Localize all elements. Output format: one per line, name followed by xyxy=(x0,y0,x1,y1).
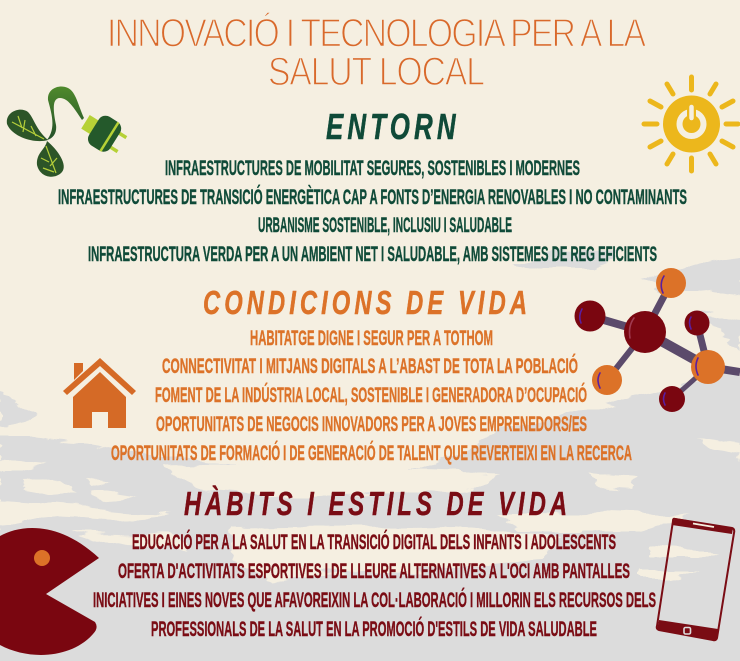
background: grey edge fill xyxy=(0,385,740,661)
icon: pac-man character xyxy=(0,528,99,655)
icon: smartphone xyxy=(657,518,734,640)
icon: house xyxy=(63,358,136,428)
heading: hàbits i estils de vida: HÀBITS I ESTILS DE VIDA xyxy=(184,484,567,523)
title: INNOVACIÓ I TECNOLOGIA PER A LA xyxy=(107,11,646,55)
heading: entorn: ENTORN xyxy=(326,107,457,147)
text block: condicions de vida items: HABITATGE DIGNE I SEGUR PER A TOTHOM xyxy=(250,326,493,350)
heading: condicions de vida: CONDICIONS DE VIDA xyxy=(203,285,527,322)
icon: sun with power symbol xyxy=(644,77,738,171)
background: cream brush streaks xyxy=(0,438,740,582)
text block: hàbits i estils de vida items xyxy=(93,529,656,641)
title xyxy=(107,11,646,94)
icon: molecule xyxy=(574,268,740,412)
text block: condicions de vida items xyxy=(111,326,632,465)
text block: entorn items xyxy=(58,156,687,266)
background: grey brush texture xyxy=(0,250,740,661)
title: SALUT LOCAL xyxy=(268,49,485,94)
icon: plant with electric plug xyxy=(7,86,131,177)
